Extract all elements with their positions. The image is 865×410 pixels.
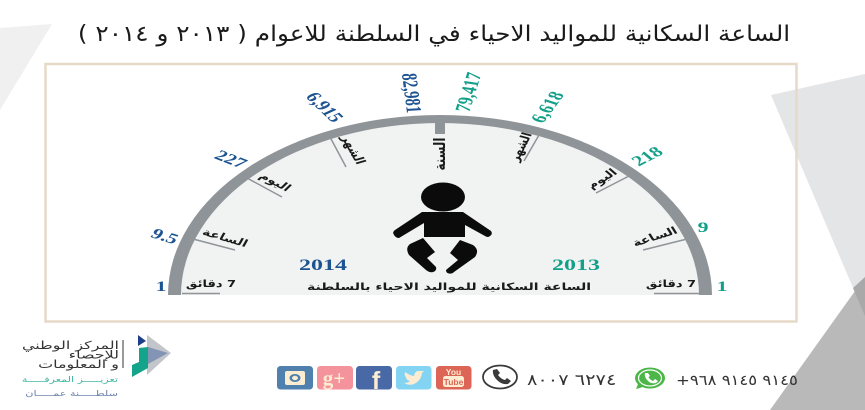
time unit labels: الساعة <box>630 225 680 249</box>
values 2013: 79,417 <box>451 71 486 113</box>
time unit labels: السنة <box>432 138 450 170</box>
logo divider <box>122 340 124 368</box>
time unit labels: 7 دقائق <box>646 278 696 290</box>
logo text: و المعلومات <box>38 358 119 371</box>
time unit labels: الشهر <box>505 131 535 164</box>
logo text <box>22 339 119 398</box>
whatsapp number: +٩٦٨ ٩١٤٥ ٩١٤٥ <box>676 372 798 389</box>
time unit labels <box>186 131 696 290</box>
gauge ticks <box>182 120 700 294</box>
icon: youtube: You <box>446 367 461 377</box>
values 2013: 6,618 <box>526 89 569 125</box>
toll free number: ٨٠٠٧ ٦٢٧٤ <box>527 372 616 389</box>
icon: youtube: Tube <box>444 377 464 387</box>
values 2013: 9 <box>698 219 708 235</box>
title: الساعة السكانية للمواليد الاحياء في السلطنة للاعوام ( ٢٠١٣ و ٢٠١٤ ) <box>78 20 790 47</box>
time unit labels: اليوم <box>583 166 621 192</box>
values 2014 <box>148 72 426 294</box>
logo text: سلطـــــنة عمـــــان <box>25 389 118 398</box>
year 2014: 2014 <box>299 257 347 274</box>
logo text: المركز الوطني <box>22 339 119 352</box>
values 2014: 227 <box>211 147 251 171</box>
icon: baby <box>393 182 492 274</box>
icon: whatsapp <box>635 368 665 389</box>
values 2013: 218 <box>627 143 667 169</box>
time unit labels: الساعة <box>200 226 250 249</box>
icon: google plus <box>317 366 353 390</box>
icon: twitter <box>396 366 432 390</box>
gauge ring <box>168 115 712 295</box>
year 2013: 2013 <box>552 257 600 274</box>
icon: instagram <box>277 366 313 390</box>
values 2013: 1 <box>717 278 727 294</box>
logo <box>22 335 171 398</box>
gauge caption: الساعة السكانية للمواليد الاحياء بالسلطنة <box>307 281 591 292</box>
social icons <box>277 366 472 395</box>
icon: facebook <box>356 366 392 395</box>
values 2013 <box>451 71 727 294</box>
time unit labels: اليوم <box>256 170 294 194</box>
time unit labels: 7 دقائق <box>186 278 236 290</box>
logo text: تعزيـــــز المعرفـــــة <box>22 375 118 384</box>
gauge: population clock <box>148 71 727 295</box>
gauge dial fill <box>181 123 699 295</box>
time unit labels: الشهر <box>338 133 369 166</box>
values 2014: 6,915 <box>301 89 348 125</box>
logo mark <box>132 335 171 377</box>
values 2014: 1 <box>156 278 166 294</box>
panel: frame <box>46 64 796 322</box>
icon: phone <box>483 366 517 388</box>
logo text: للإحصاء <box>69 349 119 362</box>
values 2014: 9.5 <box>148 225 182 247</box>
values 2014: 82,981 <box>397 72 426 114</box>
icon: youtube <box>436 366 472 390</box>
icon: google plus: g+ <box>323 366 345 390</box>
icon: facebook: f <box>372 367 381 395</box>
